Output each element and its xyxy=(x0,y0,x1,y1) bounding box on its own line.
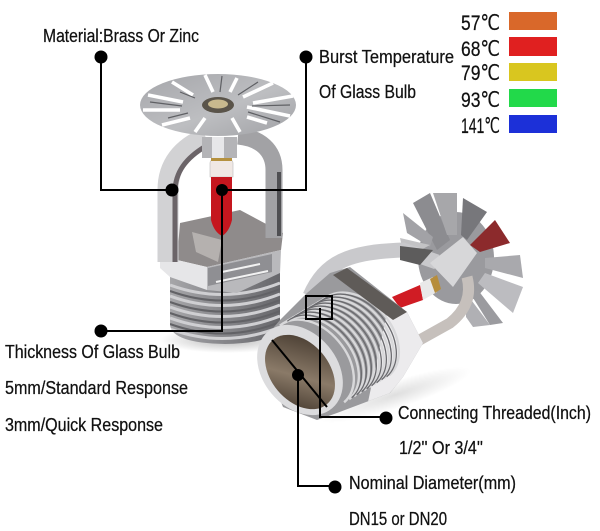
label: nominal diameter: Nominal Diameter(mm) xyxy=(349,473,516,493)
legend row: 57°C orange: 57℃ xyxy=(461,12,500,35)
legend row: 141°C blue: 141℃ xyxy=(461,115,500,138)
label: nominal diameter xyxy=(349,473,516,529)
frame arms xyxy=(168,136,279,262)
inlet opening xyxy=(251,321,349,423)
threaded body xyxy=(273,267,423,420)
front ring xyxy=(240,308,360,432)
glass bulb xyxy=(210,158,233,236)
deflector xyxy=(140,74,296,136)
label: thickness of glass bulb: 5mm/Standard Response xyxy=(5,378,188,398)
deflector blades xyxy=(400,193,523,327)
label: thickness of glass bulb: Thickness Of Glass Bulb xyxy=(5,342,180,362)
label: thickness of glass bulb: 3mm/Quick Response xyxy=(5,415,163,435)
threaded base xyxy=(170,272,280,346)
label: burst temperature: Burst Temperature xyxy=(319,47,454,67)
callout dots xyxy=(94,50,392,494)
sprinkler: upright chrome sprinkler xyxy=(140,74,296,353)
legend row: 68°C red: 68℃ xyxy=(461,38,500,61)
hexagonal body xyxy=(160,210,283,293)
shadow under sprinkler xyxy=(160,327,296,353)
wrench flat plate xyxy=(333,268,407,320)
label: burst temperature xyxy=(319,47,454,102)
hub xyxy=(202,137,237,158)
label: connecting thread xyxy=(398,403,591,458)
label: material: Material:Brass Or Zinc xyxy=(43,26,199,46)
speckled arm section xyxy=(400,246,433,265)
soft shadow xyxy=(315,357,475,433)
label: nominal diameter: DN15 or DN20 xyxy=(349,509,447,529)
glass bulb xyxy=(392,275,441,308)
label: connecting thread: 1/2'' Or 3/4'' xyxy=(399,438,483,458)
upper frame arm xyxy=(310,250,437,296)
legend row: 79°C yellow: 79℃ xyxy=(461,62,500,85)
callout lines xyxy=(101,57,386,486)
legend row: 93°C green: 93℃ xyxy=(461,89,500,112)
label: burst temperature: Of Glass Bulb xyxy=(319,82,416,102)
label: thickness of glass bulb xyxy=(5,342,188,435)
lower frame arm xyxy=(416,277,469,342)
legend: burst temperature colours xyxy=(461,12,557,138)
sprinkler: angled chrome sprinkler xyxy=(257,193,523,420)
hub plate xyxy=(430,237,477,287)
deflector backing disc xyxy=(418,212,494,304)
